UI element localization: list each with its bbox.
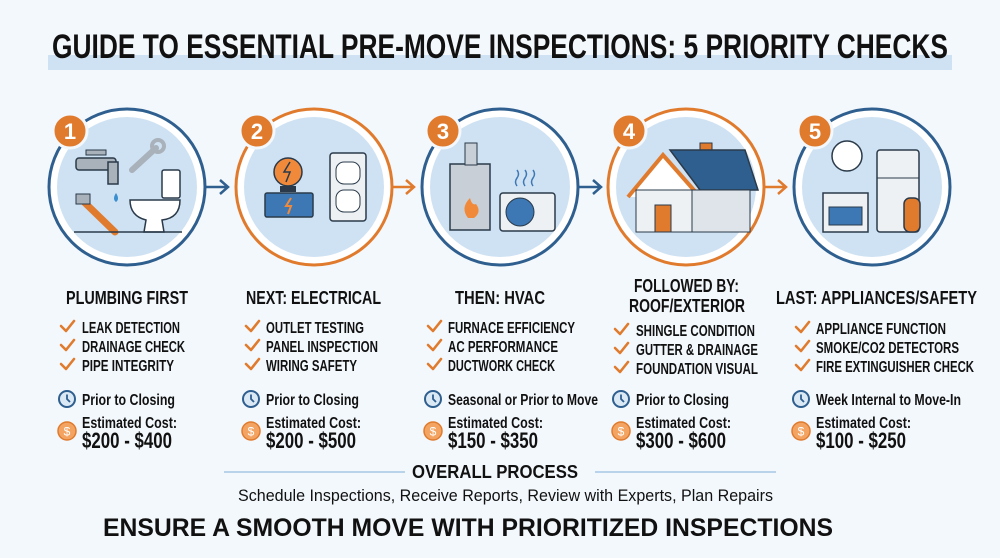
column 2 text: electrical: OUTLET TESTING (266, 320, 364, 337)
column 2 text: electrical: Prior to Closing (266, 392, 359, 409)
column 2 text: electrical (242, 288, 381, 453)
column 3 text: hvac (424, 288, 598, 453)
icon: smoke detector (832, 141, 862, 171)
overall process: Schedule Inspections, Receive Reports, Review with Experts, Plan Repairs (238, 486, 773, 505)
column 4 text: roof: $300 - $600 (636, 428, 726, 453)
column 5 text: appliances: APPLIANCE FUNCTION (816, 321, 946, 338)
badge 3 (426, 114, 460, 148)
column 4 text: roof: Prior to Closing (636, 392, 729, 409)
step 2 circle: electrical (236, 109, 392, 265)
badge 1 (53, 114, 87, 148)
overall process: OVERALL PROCESS (412, 462, 578, 482)
column 3 text: hvac: DUCTWORK CHECK (448, 358, 555, 375)
icon: extinguisher (904, 198, 920, 232)
column 4 text: roof: GUTTER & DRAINAGE (636, 342, 758, 359)
icon: pipe wrench (76, 194, 115, 232)
overall process (224, 462, 776, 505)
icon: furnace (450, 143, 490, 230)
column 1 text: plumbing: PLUMBING FIRST (66, 288, 188, 308)
column 1 text: plumbing: PIPE INTEGRITY (82, 358, 174, 375)
column 4 text: roof: FOUNDATION VISUAL (636, 361, 758, 378)
column 1 text: plumbing: $200 - $400 (82, 428, 172, 453)
badge 4 (612, 114, 646, 148)
column 3 text: hvac: FURNACE EFFICIENCY (448, 320, 575, 337)
column 2 text: electrical: WIRING SAFETY (266, 358, 357, 375)
arrow 4 (764, 180, 786, 194)
icon: stove (823, 193, 868, 232)
badge 5: 5 (809, 119, 821, 144)
column 5 text: appliances: Week Internal to Move-In (816, 392, 961, 409)
icon: faucet (76, 150, 118, 202)
badge 1: 1 (64, 119, 76, 144)
badge 2 (240, 114, 274, 148)
column 4 text: roof: Estimated Cost: (636, 415, 731, 432)
arrow 2 (392, 180, 414, 194)
arrow 1 (205, 180, 228, 194)
column 3 text: hvac: AC PERFORMANCE (448, 339, 558, 356)
column 5 text: appliances (776, 288, 977, 453)
column 5 text: appliances: Estimated Cost: (816, 415, 911, 432)
column 4 text: roof (612, 276, 758, 453)
column 4 text: roof: SHINGLE CONDITION (636, 323, 755, 340)
column 2 text: electrical: $200 - $500 (266, 428, 356, 453)
footer: ENSURE A SMOOTH MOVE WITH PRIORITIZED INSPECTIONS (103, 514, 833, 542)
column 1 text: plumbing: LEAK DETECTION (82, 320, 180, 337)
column 3 text: hvac: THEN: HVAC (455, 288, 545, 308)
step 3 circle: hvac (422, 109, 578, 265)
step 4 circle: roof (608, 109, 764, 265)
badge 3: 3 (437, 119, 449, 144)
icon: house (628, 143, 758, 232)
badge 5 (798, 114, 832, 148)
column 2 text: electrical: PANEL INSPECTION (266, 339, 378, 356)
column 4 text: roof: FOLLOWED BY: (634, 276, 739, 296)
step 1 circle: plumbing (49, 109, 205, 265)
column 2 text: electrical: NEXT: ELECTRICAL (246, 288, 381, 308)
column 1 text: plumbing: Prior to Closing (82, 392, 175, 409)
step 5 circle: appliances (794, 109, 950, 265)
icon: toilet (74, 170, 182, 232)
icon: ac unit (500, 170, 555, 231)
icon: outlet (330, 153, 366, 221)
arrow 3 (578, 180, 601, 194)
column 3 text: hvac: Seasonal or Prior to Move (448, 392, 598, 409)
column 4 text: roof: ROOF/EXTERIOR (629, 296, 745, 316)
icon: wrench (132, 140, 164, 170)
icon: bulb and panel (265, 158, 313, 217)
column 2 text: electrical: Estimated Cost: (266, 415, 361, 432)
column 1 text: plumbing: Estimated Cost: (82, 415, 177, 432)
badge 4: 4 (623, 119, 636, 144)
column 3 text: hvac: Estimated Cost: (448, 415, 543, 432)
column 1 text: plumbing: DRAINAGE CHECK (82, 339, 185, 356)
column 3 text: hvac: $150 - $350 (448, 428, 538, 453)
column 5 text: appliances: $100 - $250 (816, 428, 906, 453)
column 1 text: plumbing (58, 288, 188, 453)
badge 2: 2 (251, 119, 263, 144)
icon: fridge (877, 150, 919, 232)
